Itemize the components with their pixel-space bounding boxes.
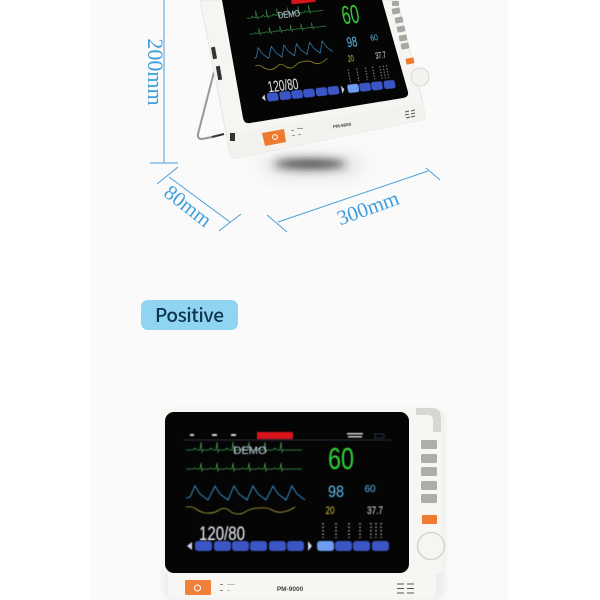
pleth trace	[252, 40, 333, 60]
resp trace	[255, 58, 328, 72]
body shadow	[163, 410, 445, 600]
dimension: width 300mm	[267, 168, 440, 232]
heading: Positive: Positive	[155, 301, 224, 328]
dimension: height 200mm	[143, 0, 178, 163]
ecg traces	[186, 442, 302, 471]
bezel	[165, 412, 409, 573]
status bar	[184, 432, 391, 440]
indicator labels	[291, 128, 303, 136]
spo2: 98	[345, 33, 359, 51]
nibp: 120/80	[266, 76, 300, 97]
pulse rate: 60	[364, 484, 376, 495]
side buttons	[392, 1, 409, 50]
monitor body	[200, 0, 425, 158]
dimension: width 300mm: 300mm	[334, 186, 402, 230]
dimension: depth 80mm	[157, 167, 241, 232]
resp rate: 20	[326, 505, 334, 517]
demo: DEMO	[234, 445, 267, 457]
side buttons	[421, 440, 437, 503]
resp trace	[186, 507, 295, 514]
speaker slots	[397, 584, 414, 593]
bezel	[222, 0, 408, 123]
knob	[411, 68, 429, 86]
heart rate: 60	[328, 441, 354, 476]
handle corner	[416, 408, 441, 432]
demo: DEMO	[277, 7, 301, 21]
orange key	[406, 57, 414, 65]
heading: Positive	[141, 300, 238, 330]
stand	[198, 72, 224, 139]
orange key	[422, 515, 437, 524]
resp: 20	[347, 52, 355, 64]
spo2: 98	[328, 482, 344, 501]
dimension: depth 80mm: 80mm	[159, 180, 217, 232]
side ports	[211, 47, 235, 141]
base strip	[227, 102, 425, 158]
temperature: 37.7	[367, 505, 383, 517]
pr: 60	[369, 32, 379, 43]
dimension: height 200mm: 200mm	[143, 38, 168, 106]
pleth trace	[186, 486, 305, 500]
knob	[418, 532, 444, 560]
screen	[184, 432, 391, 551]
ecg traces	[246, 4, 326, 36]
indicators	[220, 584, 235, 591]
soft keys	[187, 541, 389, 551]
power button	[185, 580, 211, 595]
monitor body	[162, 407, 444, 598]
temp: 37.7	[374, 49, 387, 61]
speaker slots	[405, 110, 415, 118]
blood pressure: 120/80	[199, 524, 245, 545]
table	[323, 523, 381, 538]
screen contents	[244, 0, 396, 102]
background panel	[90, 0, 508, 600]
front monitor	[162, 407, 445, 600]
top monitor, angled view	[198, 0, 429, 173]
soft keys	[261, 80, 396, 102]
model label: PM-9000	[333, 122, 352, 129]
power button	[262, 129, 286, 146]
shadow	[260, 159, 364, 173]
model label: PM-9000	[277, 586, 304, 593]
table	[348, 65, 389, 82]
